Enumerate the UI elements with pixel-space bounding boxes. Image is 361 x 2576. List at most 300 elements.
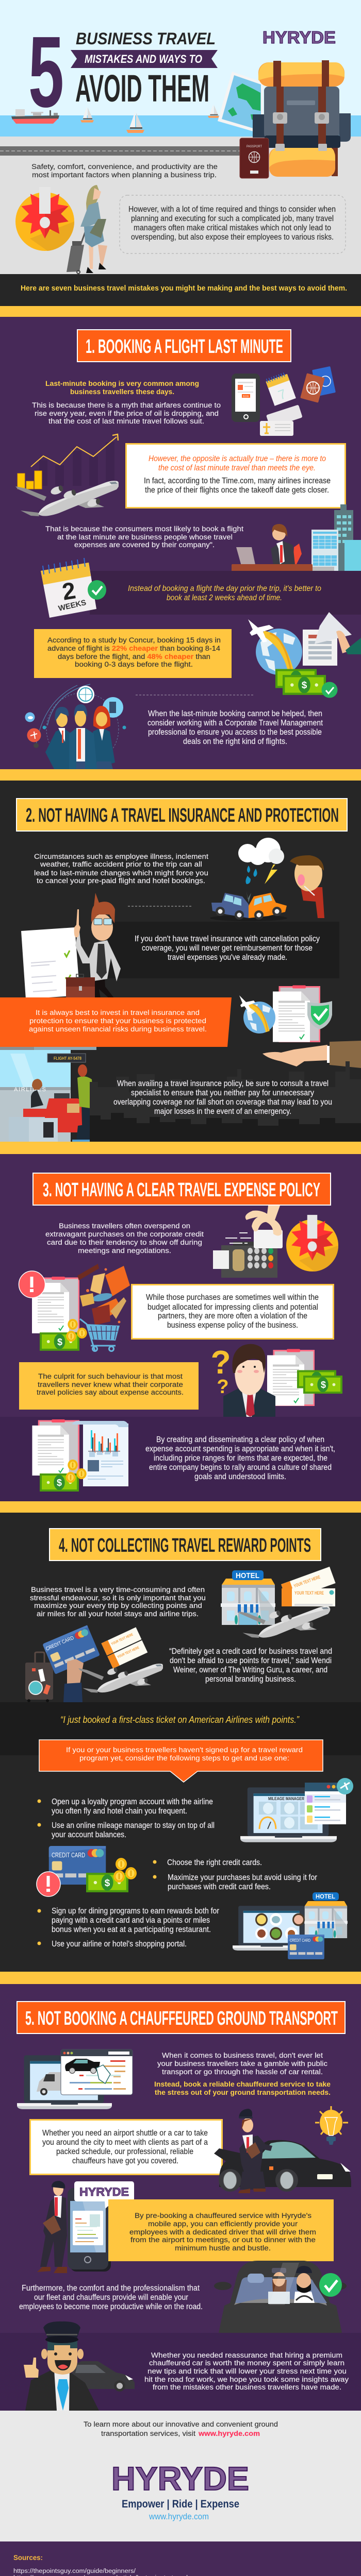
icon group: globe receipt and cash: [248, 612, 361, 698]
icon: van: [37, 2072, 62, 2095]
text: consult a specialist: [113, 1079, 332, 1116]
intro callout: dashed box: overspending, but also expose their employees to various risks.: [131, 233, 334, 242]
icon: cash: $: [57, 1337, 62, 1347]
hero title: [28, 15, 218, 128]
logo: hyryde: HYRYDE: [262, 28, 336, 47]
callout: concur study: booking 0-3 days before the flight.: [75, 660, 193, 668]
panel: city skyline: [90, 1061, 361, 1142]
text: corporate travel management: [147, 709, 323, 746]
text: comfort and professionalism: [19, 2284, 203, 2311]
text: comfort and professionalism: employees to become more productive while on the road.: [19, 2302, 203, 2311]
icon group: insurance man with policy: [21, 893, 121, 999]
callout: the culprit: travel policies say about expense accounts.: [37, 1388, 184, 1396]
sources: https://thepointsguy.com/guide/beginners/: [13, 2568, 136, 2574]
text: last-minute booking lead: business travellers these days.: [70, 388, 174, 396]
icon: cash: $: [57, 1478, 62, 1488]
icon: phone booking app: BOOK: [243, 395, 250, 398]
icon: green check: [88, 580, 106, 600]
icon: green check: [322, 682, 337, 698]
icon: meals on screen: [255, 1913, 305, 1940]
icon: small plane: [239, 995, 255, 1012]
quote: wendi weiner: don't be afraid to use points for travel,” said Wendi: [170, 1656, 332, 1665]
callout: opposite is true: the price of their flights once the takeoff date gets closer.: [145, 486, 329, 495]
sign: airlines lettering: AIRLINES: [14, 1087, 46, 1093]
icon: businesswoman with suitcase: [67, 185, 107, 274]
person: thinking man: [223, 1344, 275, 1417]
icon: hotel: [221, 1570, 275, 1625]
icon: coins: [113, 1858, 137, 1883]
person: passenger with laptop: [268, 2268, 290, 2304]
panel: no reimbursement: coverage, you will never get reimbursement for those: [142, 944, 313, 953]
intro text: [31, 163, 218, 179]
callout: the culprit: [19, 1362, 199, 1410]
icon: sailboat: [80, 106, 94, 123]
icon: sailboat: [126, 111, 144, 133]
banner: invest in insurance: protection to ensure that your business is protected: [29, 1017, 206, 1025]
icon: light bulb: [315, 2106, 348, 2145]
text: corporate travel management: When the last-minute booking cannot be helped, then: [148, 709, 322, 718]
text: circumstances: lead to last-minute changes which might force you: [34, 869, 208, 877]
icon group: protected document: [239, 985, 361, 1068]
bullet list: dining and shopping: Use your airline or hotel's shopping portal.: [52, 1940, 187, 1948]
callout: concur study: [34, 629, 232, 678]
text: closing insights: from the mistakes other business travellers have made.: [153, 2383, 341, 2391]
callout: opposite is true: [126, 444, 346, 508]
person: chauffeur with clipboard: [37, 2181, 67, 2273]
icon: coins: [65, 1460, 87, 1483]
text: overspending: card due to their tendency to show off during: [47, 1239, 202, 1246]
icon: sailboat: [208, 104, 219, 118]
text: closing insights: new tips and trick that will lower your stress next time you: [147, 2367, 347, 2375]
icon: cash: $: [321, 1380, 326, 1390]
text: clear policy: By creating and disseminating a clear policy of when: [156, 1435, 324, 1444]
icon: credit card: [42, 1625, 100, 1674]
icon: boarding tickets: [260, 404, 303, 436]
callout: airport shuttle: packed schedule, our professional, reliable: [56, 2147, 193, 2156]
icon group: trip risks: [210, 838, 324, 921]
text: overspending: meetings and negotiations.: [78, 1247, 171, 1255]
icon: small plane: [248, 619, 274, 642]
text: book two weeks ahead: book at least 2 weeks ahead of time.: [167, 594, 282, 602]
text: consult a specialist: specialist to ensure that you neither pay for unnecessary: [131, 1089, 314, 1097]
windshield glare: [269, 2263, 299, 2305]
icon: shield: [307, 1001, 332, 1029]
icon: suitcase: [25, 1652, 53, 1702]
icon: report chart: [72, 1421, 128, 1486]
heading: section 4: [50, 1529, 321, 1561]
text: closing insights: [144, 2351, 349, 2391]
title line: avoid them: AVOID THEM: [75, 67, 209, 110]
text: airfare myth: rise every year, even if the price of oil is dropping, and: [35, 410, 219, 417]
icon: calendar page: 7: [276, 386, 288, 403]
icon: laptop: [240, 1787, 337, 1842]
bullet list: loyalty and mileage: Open up a loyalty program account with the airline: [52, 1798, 213, 1806]
icon: world map: [218, 72, 263, 131]
text: circumstances: weather, traffic accident prior to the trip can all: [40, 860, 202, 868]
icon: laptop: [233, 1906, 311, 1951]
icon: cash: [40, 1332, 79, 1351]
person: left man: [45, 707, 76, 769]
icon: calendar two weeks: WEEKS: [57, 598, 87, 613]
text: clear policy: [145, 1435, 335, 1481]
divider: dashed: [136, 694, 254, 696]
bullet list: credit cards: purchases with credit card fees.: [168, 1883, 271, 1891]
callout: the culprit: travellers never knew what their corporate: [38, 1381, 183, 1388]
icon: receipt: [303, 612, 352, 666]
icon group: hotel tickets plane: [221, 1567, 336, 1638]
icon: airplane: [238, 1606, 330, 1638]
icon: shopping cart: [80, 1319, 120, 1351]
callout: concur study: days before the flight, and 48% cheaper than: [58, 653, 210, 660]
icon: calendar two weeks: [41, 558, 96, 618]
icon: calendar page: [265, 371, 296, 406]
text: clear policy: entire company begins to rally around a culture of shared: [149, 1463, 332, 1472]
icon: credit card: [254, 1230, 283, 1248]
bullet list: credit cards: [153, 1858, 317, 1891]
callout: policy violation: partners, they are more often a violation of the: [158, 1312, 307, 1320]
bullet list: credit cards: Choose the right credit cards.: [167, 1858, 262, 1867]
bullet list: dining and shopping: paying with a credit card and via a points or miles: [52, 1916, 210, 1925]
icon: globe: [243, 1002, 275, 1033]
icon: speech bubble logo: HYRYDE: [79, 2185, 129, 2198]
text: airfare myth: that the cost of last minute travel follows suit.: [48, 417, 204, 425]
icon: hand and sleeve: [63, 1659, 84, 1702]
icon: question marks: ?: [210, 1344, 231, 1381]
icon group: shopping overspend: [19, 1264, 130, 1351]
intro text: Safety, comfort, convenience, and productivity are the: [31, 163, 218, 171]
icon: cash: [297, 1370, 342, 1394]
text: book two weeks ahead: [128, 584, 321, 602]
callout: airport shuttle: chauffeurs have got you covered.: [72, 2157, 178, 2165]
callout: policy violation: business expense policy of the business.: [167, 1321, 298, 1330]
icon: speech bubble logo: [74, 2181, 134, 2209]
banner: invest in insurance: [0, 997, 232, 1047]
icon: hand: [336, 631, 361, 654]
panel: no reimbursement: If you don't have travel insurance with cancellation policy: [135, 935, 320, 943]
icon: crashed cars: [210, 891, 287, 921]
callout: pre-booking: mobile app, you can efficiently provide your: [148, 2220, 298, 2228]
text: don't gamble: your business travellers take a gamble with public: [157, 2060, 327, 2067]
text: circumstances: Circumstances such as employee illness, inclement: [34, 853, 208, 860]
icon: green check: [319, 2273, 342, 2297]
text: overspending: extravagant purchases on the corporate credit: [45, 1230, 204, 1238]
icon: question marks: ?: [217, 1376, 229, 1398]
icon: credit card: CREDIT CARD: [52, 1851, 85, 1859]
intro callout: dashed box: planning and executing for such a complicated job, many travel: [131, 214, 334, 223]
text: clear policy: including price ranges for items that are expected, the: [154, 1454, 327, 1463]
callout: policy violation: [132, 1285, 333, 1338]
bullet list: dining and shopping: [37, 1907, 219, 1948]
text: corporate travel management: professional to ensure you access to the best possible: [148, 728, 322, 737]
icon: credit card: CREDIT CARD: [290, 1938, 310, 1943]
text: book chauffeur: the stress out of your ground transportation needs.: [155, 2089, 331, 2096]
sign: flight board: FLIGHT AY-5478: [54, 1056, 81, 1061]
text: business people: at the last minute are business people whose travel: [57, 533, 233, 541]
icon: hotel: HOTEL: [236, 1571, 259, 1580]
text: circumstances: [34, 853, 208, 885]
heading: section 1: [77, 330, 291, 362]
icon: cargo ship: [11, 109, 59, 124]
text: circumstances: to cancel your pre-paid flight and hotel bookings.: [37, 877, 205, 885]
text: airfare myth: This is because there is a myth that airfares continue to: [32, 401, 221, 409]
icon: airline tickets: [101, 1627, 147, 1669]
quote: wendi weiner: [169, 1647, 332, 1684]
bullet list: loyalty and mileage: you often fly and hotel chain you frequent.: [52, 1807, 187, 1816]
text: clear policy: goals and understood limits.: [194, 1472, 286, 1481]
intro text: most important factors when planning a business trip.: [32, 171, 217, 179]
person: driver: [294, 2266, 315, 2303]
cart basket grid: [89, 1326, 118, 1340]
heading: section 3: [33, 1173, 331, 1205]
text: business people: That is because the consumers most likely to book a flight: [45, 525, 243, 533]
icon group: happy chauffeur and sedan: [24, 2321, 135, 2411]
callout: airport shuttle: [30, 2120, 222, 2174]
text: collect points: maximize your every trip by collecting points and: [34, 1602, 202, 1609]
callout: policy violation: budget allocated for impressing clients and potential: [147, 1303, 318, 1312]
person: right woman: [92, 706, 115, 769]
icon: credit card: CREDIT CARD: [45, 1635, 75, 1652]
icon group: dining laptop and hotel: [233, 1892, 348, 1959]
icon: laptop: [17, 2055, 112, 2109]
text: corporate travel management: deals on the right kind of flights.: [183, 737, 287, 746]
icon: red alert: [37, 1872, 60, 1896]
heading: section 2: [17, 799, 347, 831]
text: don't gamble: When it comes to business travel, don't ever let: [162, 2052, 323, 2059]
panel: no reimbursement: [101, 922, 339, 978]
callout: pre-booking: employees with a dedicated driver that will drive them: [129, 2228, 316, 2236]
bullet list: dining and shopping: bonus when you eat at a participating restaurant.: [52, 1925, 211, 1934]
person: centre man: [69, 704, 97, 769]
text: overspending: Business travellers often overspend on: [59, 1222, 190, 1230]
text: consult a specialist: overlapping coverage nor fall short on coverage that may lead to you: [113, 1098, 332, 1107]
icon: clipboard document: [273, 985, 320, 1042]
sources: [13, 2553, 348, 2576]
icon: black car: [214, 2140, 351, 2192]
icon group: car front with passenger: [214, 2261, 347, 2333]
banner: invest in insurance: against unseen financial risks during business travel.: [29, 1025, 207, 1033]
icon group: card suitcase plane: [25, 1625, 163, 1702]
person: traveller in green: [72, 1064, 96, 1142]
text: learn more: [84, 2420, 278, 2437]
icon: clipboard document: [267, 1349, 314, 1405]
icon: phone booking app: [232, 374, 260, 422]
text: book chauffeur: [154, 2080, 331, 2096]
text: collect points: air miles for all your hotel stays and airline trips.: [37, 1610, 199, 1618]
callout: pre-booking: from the airport to meetings, or out to dinner with the: [130, 2236, 316, 2244]
text: comfort and professionalism: Furthermore, the comfort and the professionalism that: [22, 2284, 200, 2293]
text: don't gamble: transport or go through the hassle of car rental.: [162, 2068, 323, 2076]
quote: first-class ticket: “I just booked a first-class ticket on American Airlines with points.”: [60, 1715, 300, 1725]
sign: flight board: [47, 1054, 86, 1062]
text: overspending: [45, 1222, 204, 1255]
quote: wendi weiner: Weiner, owner of The Writing Guru, a career, and: [173, 1666, 327, 1674]
icon: cash: $: [302, 680, 307, 691]
quote: wendi weiner: personal branding business.: [205, 1675, 296, 1684]
callout: pre-booking: By pre-booking a chauffeured service with Hyryde's: [135, 2212, 311, 2219]
icon: calendar two weeks: 2: [60, 577, 77, 605]
panel: no reimbursement: travel expenses you've already made.: [168, 953, 287, 962]
icon: backpack: [253, 60, 351, 177]
icon: alert badge: [15, 187, 74, 251]
icon: question marks: [210, 1344, 231, 1398]
icon: airline tickets: YOUR TEXT HERE: [111, 1633, 134, 1646]
icon: open hand: [262, 1041, 361, 1068]
person: check-in agent: [31, 1079, 43, 1108]
icon group: policy report: [32, 1419, 128, 1492]
callout: airport shuttle: you around the city to meet with clients as part of a: [42, 2138, 208, 2147]
icon: city buildings: [311, 504, 361, 571]
text: consult a specialist: major losses in the event of an emergency.: [154, 1107, 291, 1116]
intro callout: dashed box: managers often make critical mistakes which not only lead to: [134, 224, 331, 232]
icon: sick man with scarf: [290, 855, 324, 918]
icon: car front: [214, 2261, 347, 2333]
icon: shopping bags and parcels: [77, 1264, 130, 1325]
chart: rising airfare: [18, 434, 118, 489]
title numeral 5: 5: [28, 15, 64, 128]
icon: booking window: [61, 2049, 133, 2095]
orbit lines and app bubbles: [25, 684, 126, 765]
icon: airport check-in scene: [0, 1047, 96, 1142]
screen tiles: MILEAGE MANAGER: [268, 1797, 304, 1801]
icon: airplane: [15, 481, 119, 516]
heading: section 5: [17, 2002, 345, 2033]
text: consult a specialist: When availing a travel insurance policy, be sure to consult a travel: [117, 1079, 329, 1088]
text: closing insights: Whether you needed reassurance that hiring a premium: [151, 2351, 342, 2359]
icon: cash: $: [105, 1878, 110, 1889]
sources: Sources:: [13, 2553, 43, 2562]
icon: coins: [66, 1319, 87, 1342]
text: don't gamble: [157, 2052, 327, 2076]
text: closing insights: chauffeured car is worth the money spent or simply learn: [149, 2359, 344, 2367]
person: man with glasses: [74, 893, 121, 998]
callout: reward steps speech bubble: program yet, consider the following steps to get and use one:: [79, 1754, 289, 1762]
icon: credit card: [49, 1846, 106, 1885]
icon: policy document: [21, 927, 80, 999]
text: business people: expenses are covered by their company".: [74, 541, 215, 549]
logo: hyryde footer: HYRYDE: [111, 2460, 249, 2497]
intro callout: dashed box: However, with a lot of time required and things to consider when: [128, 205, 336, 214]
quote: wendi weiner: “Definitely get a credit card for business travel and: [169, 1647, 332, 1656]
icon group: booking items: [232, 366, 336, 436]
panel band: two weeks: [41, 558, 361, 618]
icon: passport: [240, 138, 269, 178]
icon: red alert: [19, 1271, 45, 1298]
icon: briefcase: [66, 974, 95, 998]
icon: passport: PASSPORT: [247, 145, 262, 148]
icon group: confused employee: [210, 1344, 342, 1417]
icon group: chauffeur and car: [214, 2106, 351, 2193]
text: learn more: www.hyryde.com: [198, 2430, 260, 2437]
callout: concur study: advance of flight is 22% cheaper than booking 8-14: [47, 645, 221, 652]
title ribbon: MISTAKES AND WAYS TO: [85, 53, 202, 65]
icon: hand swiping: [245, 1206, 282, 1235]
icon: plane badge: [337, 1778, 353, 1794]
icon: globe: [256, 629, 302, 675]
callout: opposite is true: However, the opposite is actually true – there is more to: [149, 454, 326, 463]
icon group: booking laptop: [17, 2049, 133, 2109]
ship and sailboats: [11, 104, 219, 133]
icon: clipboard document: [32, 1277, 79, 1333]
speed lines: [225, 1233, 251, 1243]
icon group: card payment: [213, 1206, 338, 1278]
text: learn more: To learn more about our innovative and convenient ground: [84, 2420, 278, 2428]
icon: cash: [86, 1873, 128, 1892]
text: book chauffeur: Instead, book a reliable chauffeured service to take: [154, 2080, 331, 2088]
icon: airline tickets: YOUR TEXT HERE: [293, 1574, 321, 1589]
icon: cash: [40, 1473, 79, 1492]
callout: pre-booking: minimum hustle and bustle.: [175, 2244, 271, 2252]
tagline: Empower | Ride | Expense: [122, 2498, 239, 2510]
divider: dashed: [128, 906, 193, 907]
icon group: mileage manager laptop: [240, 1778, 353, 1842]
icon: credit card: [288, 1935, 324, 1959]
banner: invest in insurance: It is always best to invest in travel insurance and: [36, 1009, 200, 1016]
text: airfare myth: [32, 401, 221, 425]
text: collect points: Business travel is a very time-consuming and often: [31, 1586, 205, 1594]
person: chauffeur: [238, 2109, 272, 2193]
text: corporate travel management: consider working with a Corporate Travel Management: [147, 719, 323, 727]
text: last-minute booking lead: [45, 380, 199, 396]
callout: reward steps speech bubble: [39, 1740, 323, 1782]
text: book two weeks ahead: Instead of booking a flight the day prior the trip, it's better to: [128, 584, 321, 593]
icon: phone: [68, 2188, 111, 2272]
text: last-minute booking lead: Last-minute booking is very common among: [45, 380, 199, 387]
icon: hotel: [304, 1892, 348, 1938]
icon: clipboard document: [32, 1419, 79, 1476]
bullet list: loyalty and mileage: [37, 1798, 215, 1839]
callout: opposite is true: In fact, according to the Time.com, many airlines increase: [144, 477, 331, 485]
icon: briefcase on counter: [43, 1122, 54, 1138]
intro callout: dashed box: [120, 195, 346, 253]
icon: airline tickets: [281, 1567, 336, 1606]
icon: sedan: [72, 2361, 135, 2392]
icon: hotel: HOTEL: [316, 1893, 335, 1900]
icon: passports: [300, 366, 336, 403]
callout: pre-booking: [108, 2199, 334, 2261]
callout: policy violation: While those purchases are sometimes well within the: [146, 1293, 319, 1302]
icon: businessman at desk: [232, 524, 313, 572]
text: learn more: transportation services, visit: [101, 2430, 195, 2437]
text: comfort and professionalism: our fleet and chauffeurs provide will enable your: [34, 2293, 188, 2302]
callout: reward steps speech bubble: If you or your business travellers haven't signed up for a travel reward: [66, 1746, 303, 1754]
icon: airplane: [78, 1664, 163, 1693]
text: collect points: [30, 1586, 206, 1618]
bullet list: loyalty and mileage: your account balances.: [52, 1831, 126, 1839]
icon: app window: [305, 1783, 346, 1824]
bullet list: credit cards: Maximize your purchases but avoid using it for: [168, 1873, 317, 1882]
callout: opposite is true: the cost of last minute travel than meets the eye.: [158, 464, 316, 472]
callout: concur study: According to a study by Concur, booking 15 days in: [47, 636, 221, 644]
screen tiles: [259, 1797, 318, 1829]
bullet list: loyalty and mileage: Use an online mileage manager to stay on top of all: [52, 1821, 215, 1830]
icon: airline tickets: YOUR TEXT HERE: [294, 1590, 324, 1596]
road: [0, 146, 242, 156]
icon: cash: [275, 669, 326, 695]
icon group: credit card and cash: [37, 1846, 137, 1896]
text: clear policy: expense account spending is appropriate and when it isn't,: [145, 1445, 335, 1453]
icon: card terminal: [213, 1242, 277, 1278]
text: closing insights: hit the road for work, we hope you took some insights away: [144, 2376, 349, 2383]
title line: business travel: BUSINESS TRAVEL: [76, 29, 216, 48]
callout: the culprit: The culprit for such behaviour is that most: [38, 1372, 183, 1380]
footer url: www.hyryde.com: [149, 2512, 209, 2521]
text: business people: [45, 525, 243, 549]
icon: storm cloud: [238, 838, 284, 884]
person: happy chauffeur: [24, 2321, 99, 2411]
bullet list: dining and shopping: Sign up for dining programs to earn rewards both for: [52, 1907, 219, 1916]
text: collect points: stressful endeavour, so it is only important that you: [30, 1594, 206, 1602]
icon: alert badge: [286, 1215, 338, 1272]
